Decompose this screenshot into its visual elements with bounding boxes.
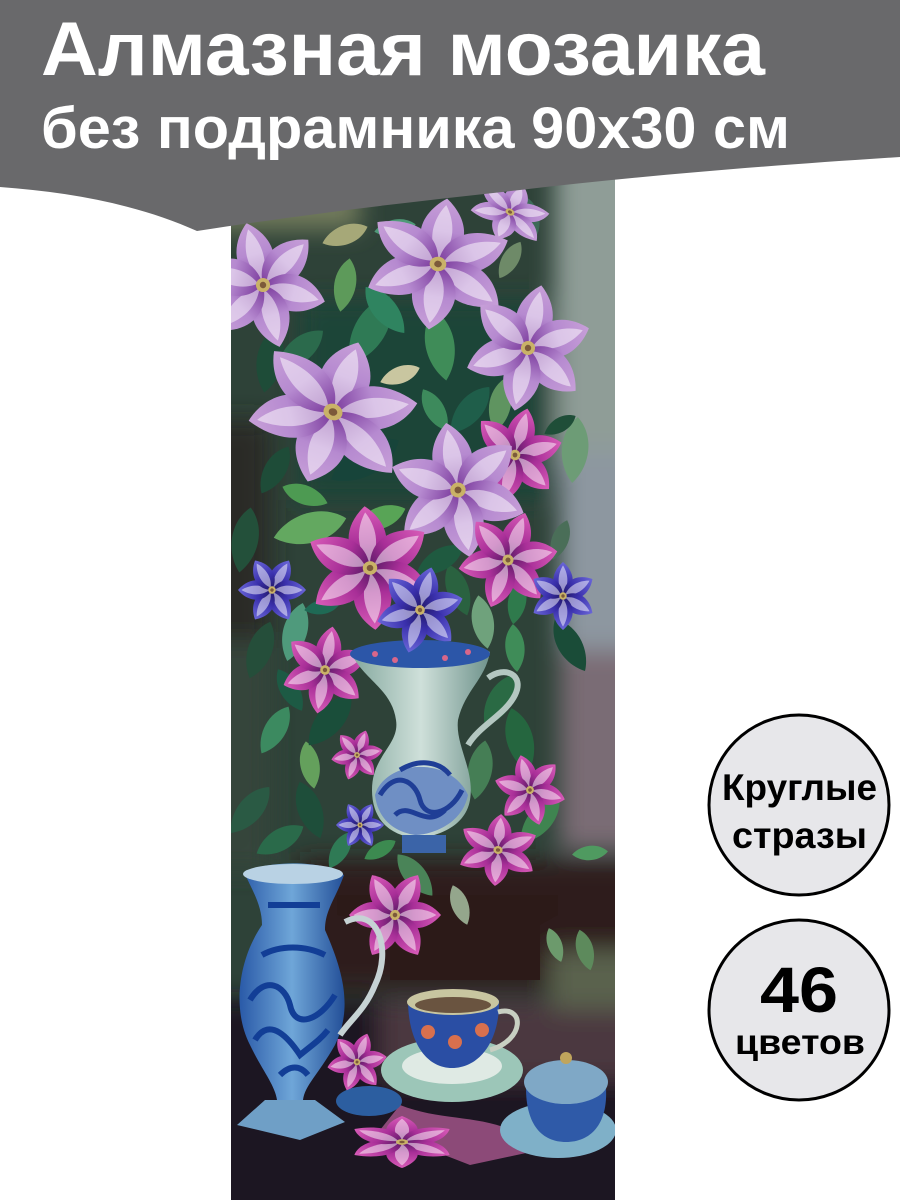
badge: 46 colours: 46 (760, 954, 838, 1026)
small dish (336, 1086, 402, 1116)
title line 2: без подрамника 90х30 см (41, 96, 790, 161)
magenta flowers (284, 506, 565, 825)
clematis flowers behind vase (231, 189, 592, 846)
flowers on table (328, 1034, 450, 1168)
blue violet flowers (238, 560, 592, 846)
blue jug (237, 863, 382, 1140)
light lilac flowers (231, 189, 589, 556)
wooden stand (390, 939, 540, 980)
teacup and saucer (381, 989, 523, 1102)
painting background (231, 180, 615, 1200)
table cloth (380, 1105, 540, 1165)
badge: 46 colours (709, 920, 889, 1100)
badge: round rhinestones: Круглые (722, 767, 877, 808)
title line 1: Алмазная мозаика (41, 7, 766, 92)
sugar bowl (500, 1052, 616, 1158)
central vase (350, 640, 518, 853)
header banner (0, 0, 900, 231)
badge: round rhinestones: стразы (732, 815, 867, 856)
painting: clematis still life (231, 180, 615, 1200)
badge: round rhinestones (709, 715, 889, 895)
foreground flowers (349, 568, 536, 955)
badge: 46 colours: цветов (735, 1023, 865, 1062)
leaves (222, 192, 609, 972)
